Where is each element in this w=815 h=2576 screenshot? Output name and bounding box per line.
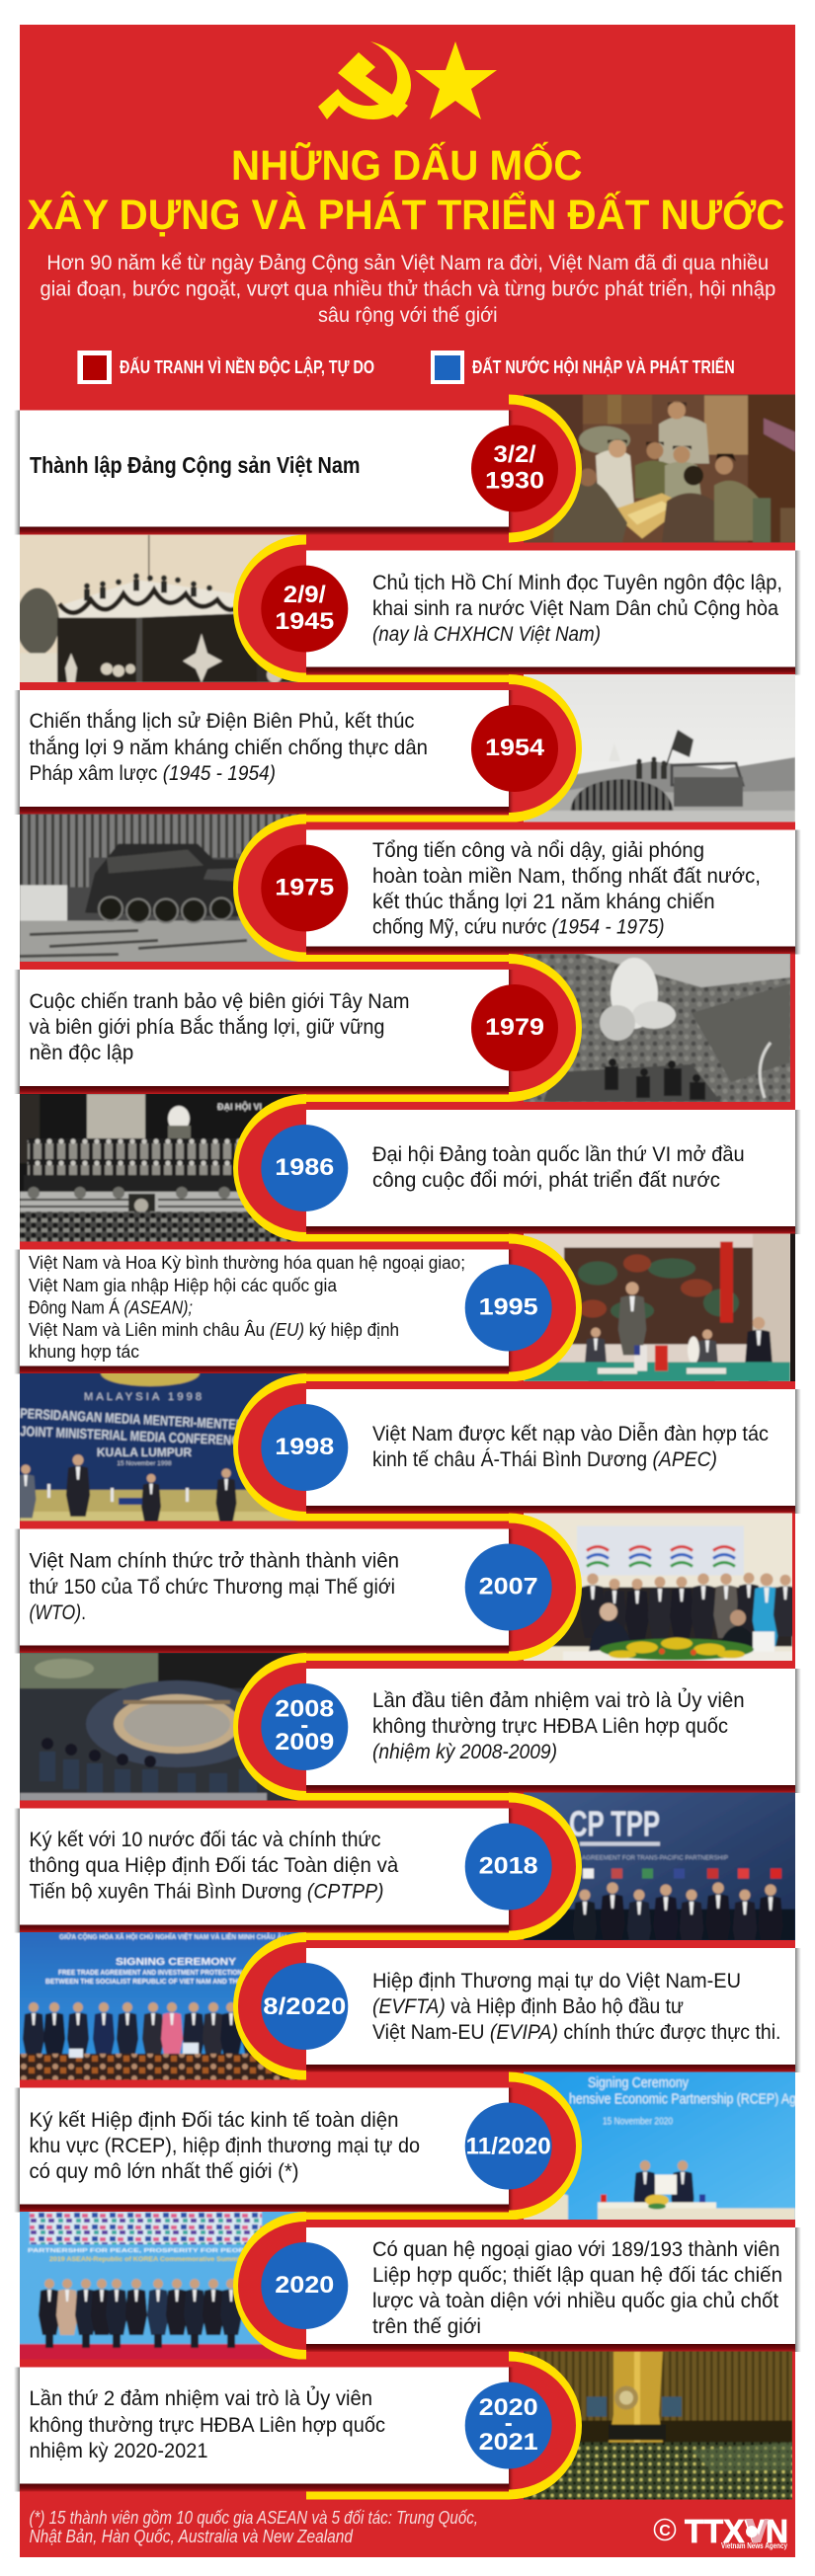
text card: Việt Nam chính thức trở thành thành viên	[30, 1548, 399, 1572]
text card: Tiến bộ xuyên Thái Bình Dương (CPTPP)	[30, 1880, 383, 1904]
date badge	[261, 2242, 348, 2329]
text card	[14, 1528, 515, 1653]
row 2020	[15, 2207, 801, 2365]
text card: nền độc lập	[30, 1041, 133, 1064]
photo: WTO accession signing	[524, 1513, 792, 1661]
text card	[14, 2087, 515, 2212]
photo: APEC ministerial conference: JOINT MINISTERIAL MEDIA CONFERENCE	[20, 1423, 247, 1448]
intro text	[40, 251, 775, 327]
date badge: 2008	[275, 1696, 334, 1722]
text card: Hiệp định Thương mại tự do Việt Nam-EU	[372, 1969, 741, 1992]
text card: (WTO).	[30, 1600, 86, 1624]
date badge: 11/2020	[466, 2133, 551, 2160]
title: XÂY DỰNG VÀ PHÁT TRIỂN ĐẤT NƯỚC	[27, 191, 784, 239]
text card	[14, 411, 515, 535]
row 2018	[14, 1787, 800, 1951]
header	[27, 41, 784, 384]
timeline arc	[20, 2352, 582, 2500]
text card: lược và toàn diện với nhiều quốc gia chủ chốt	[372, 2289, 778, 2312]
date badge	[471, 984, 558, 1071]
photo: EVFTA signing ceremony: GIỮA CỘNG HÒA XÃ HỘI CHỦ NGHĨA VIỆT NAM VÀ LIÊN MINH CHÂU ÂU	[59, 1932, 286, 1941]
photo: APEC ministerial conference	[20, 1373, 306, 1521]
row 1986	[15, 1089, 801, 1247]
photo: UN Security Council chamber	[20, 1653, 306, 1801]
photo: tank at the palace gate	[20, 814, 306, 962]
text card: Tổng tiến công và nổi dậy, giải phóng	[372, 838, 704, 862]
date badge: 2007	[479, 1574, 538, 1600]
text card: Ký kết Hiệp định Đối tác kinh tế toàn diện	[30, 2108, 399, 2132]
row 11/2020	[14, 2068, 800, 2225]
date badge	[261, 845, 348, 932]
timeline arc	[20, 1793, 582, 1941]
photo: EVFTA signing ceremony	[20, 1932, 306, 2079]
yellow closing line under last card	[306, 2492, 509, 2500]
timeline arc	[233, 814, 795, 962]
text card	[306, 551, 801, 675]
date badge	[261, 1125, 348, 1211]
text card: Cuộc chiến tranh bảo vệ biên giới Tây Nam	[30, 989, 409, 1013]
timeline arc	[233, 1932, 795, 2080]
date badge	[465, 1823, 552, 1910]
timeline arc	[20, 674, 582, 822]
date badge: 1954	[485, 735, 545, 761]
row 1954	[14, 669, 800, 827]
photo: APEC ministerial conference: MALAYSIA 1998	[84, 1391, 202, 1403]
timeline arc	[233, 1653, 795, 1801]
photo: CPTPP signing group	[524, 1793, 795, 1940]
text card: (nay là CHXHCN Việt Nam)	[372, 622, 601, 646]
text card: Việt Nam được kết nạp vào Diễn đàn hợp tác	[372, 1421, 769, 1445]
date badge: 1986	[275, 1154, 334, 1181]
row 2008-2009	[15, 1648, 801, 1806]
date badge: 2009	[275, 1729, 334, 1756]
legend: ĐẤU TRANH VÌ NỀN ĐỘC LẬP, TỰ DO	[120, 356, 374, 377]
text card	[14, 1809, 515, 1933]
text card: Việt Nam gia nhập Hiệp hội các quốc gia	[29, 1276, 338, 1295]
date badge	[471, 705, 558, 792]
footnote	[30, 2508, 478, 2546]
text card: Đại hội Đảng toàn quốc lần thứ VI mở đầu	[372, 1142, 745, 1166]
photo: RCEP signing ceremony: 15 November 2020	[603, 2117, 673, 2127]
row 2020-2021	[14, 2346, 800, 2504]
date badge: 3/2/	[494, 441, 536, 468]
date badge: 1975	[275, 875, 334, 900]
text card	[14, 1250, 515, 1374]
footnote: (*) 15 thành viên gồm 10 quốc gia ASEAN và 5 đối tác: Trung Quốc,	[30, 2508, 478, 2528]
row 1930	[14, 389, 800, 547]
timeline arc	[20, 1234, 795, 1382]
photo: ASEAN summit group: PARTNERSHIP FOR PEACE, PROSPERITY FOR PEOPLE	[28, 2248, 256, 2254]
date badge	[471, 425, 558, 511]
title: NHỮNG DẤU MỐC	[231, 141, 583, 190]
text card: kinh tế châu Á-Thái Bình Dương (APEC)	[372, 1446, 717, 1471]
photo: UN General Assembly hall	[524, 2352, 792, 2500]
icon: hammer and sickle with star	[318, 41, 497, 119]
row 1995	[14, 1228, 795, 1387]
text card: nhiệm kỳ 2020-2021	[30, 2439, 207, 2462]
date badge	[261, 1963, 348, 2050]
date badge	[261, 565, 348, 652]
photo: CPTPP signing group: AGREEMENT FOR TRANS-PACIFIC PARTNERSHIP	[582, 1856, 728, 1862]
date badge	[465, 2381, 552, 2468]
text card: khai sinh ra nước Việt Nam Dân chủ Cộng hòa	[372, 596, 778, 620]
footer	[30, 2508, 788, 2550]
row 1945	[15, 529, 801, 687]
photo: independence declaration stage	[20, 535, 306, 682]
text card	[306, 829, 801, 954]
timeline arc	[233, 535, 795, 683]
date badge: 2/9/	[284, 582, 326, 608]
timeline arc	[509, 395, 582, 543]
date badge: 1930	[485, 468, 544, 494]
text card: Liệp hợp quốc; thiết lập quan hệ đối tác chiến	[372, 2263, 782, 2287]
date badge	[261, 1683, 348, 1770]
photo: ASEAN summit group: 2019 ASEAN-Republic of KOREA Commemorative Summit	[49, 2257, 242, 2263]
row 1998	[15, 1361, 801, 1526]
photo: painting of party founding	[524, 395, 795, 543]
text card	[306, 1110, 801, 1234]
date badge: 2020	[275, 2272, 334, 2299]
date badge	[465, 1264, 552, 1351]
photo: APEC ministerial conference: 15 November 1998	[117, 1460, 172, 1467]
intro text: sâu rộng với thế giới	[318, 303, 498, 327]
text card: không thường trực HĐBA Liên hợp quốc	[30, 2413, 385, 2437]
logo: TTXVN: C	[659, 2523, 671, 2539]
date badge: 2018	[479, 1852, 538, 1880]
photo: APEC ministerial conference: PERSIDANGAN MEDIA MENTERI-MENTERI	[20, 1405, 247, 1433]
text card	[14, 970, 515, 1094]
timeline arc	[233, 2212, 795, 2360]
photo: CPTPP signing group: CP TPP	[569, 1803, 660, 1844]
photo: Dien Bien Phu bunker and flag	[524, 674, 795, 821]
row 8/2020	[15, 1927, 801, 2085]
text card: Lần thứ 2 đảm nhiệm vai trò là Ủy viên	[30, 2385, 372, 2410]
text card: khung hợp tác	[29, 1342, 139, 1362]
text card: (nhiệm kỳ 2008-2009)	[372, 1740, 557, 1763]
text card: chống Mỹ, cứu nước (1954 - 1975)	[372, 914, 665, 938]
text card: Việt Nam-EU (EVIPA) chính thức được thực thi.	[372, 2020, 780, 2044]
date badge: -	[300, 1712, 308, 1739]
row 2007	[14, 1509, 800, 1667]
date badge	[465, 1544, 552, 1631]
text card: Việt Nam và Liên minh châu Âu (EU) ký hiệp định	[29, 1320, 399, 1340]
row 1975	[15, 810, 801, 968]
legend	[77, 351, 735, 384]
photo: sixth party congress hall: ĐẠI HỘI VI	[217, 1101, 262, 1112]
date badge: 1995	[479, 1293, 538, 1321]
date badge	[261, 1404, 348, 1491]
text card: Có quan hệ ngoại giao với 189/193 thành viên	[372, 2237, 780, 2261]
text card	[306, 1669, 801, 1793]
photo: APEC ministerial conference: KUALA LUMPUR	[97, 1445, 192, 1459]
date badge: -	[505, 2410, 513, 2437]
text card: có quy mô lớn nhất thế giới (*)	[30, 2159, 298, 2183]
photo: EVFTA signing ceremony: BETWEEN THE SOCIALIST REPUBLIC OF VIET NAM AND THE	[45, 1979, 242, 1986]
text card: thắng lợi 9 năm kháng chiến chống thực dân	[30, 735, 428, 759]
footnote: Nhật Bản, Hàn Quốc, Australia và New Zealand	[30, 2527, 354, 2546]
title	[27, 141, 784, 239]
photo: RCEP signing ceremony: Signing Ceremony	[588, 2074, 689, 2091]
timeline arc	[20, 2071, 582, 2220]
date badge: 2021	[479, 2429, 538, 2456]
text card: thứ 150 của Tổ chức Thương mại Thế giới	[30, 1575, 395, 1599]
text card: không thường trực HĐBA Liên hợp quốc	[372, 1714, 728, 1738]
text card	[14, 690, 515, 815]
date badge: 1998	[275, 1434, 334, 1460]
text card: Chiến thắng lịch sử Điện Biên Phủ, kết thúc	[30, 708, 415, 733]
text card: công cuộc đổi mới, phát triển đất nước	[372, 1168, 720, 1192]
date badge: 2020	[479, 2394, 538, 2421]
text card: Ký kết với 10 nước đối tác và chính thức	[30, 1828, 381, 1851]
text card	[306, 2227, 801, 2352]
photo: sixth party congress hall	[20, 1094, 306, 1242]
text card: trên thế giới	[372, 2314, 481, 2338]
text card: khu vực (RCEP), hiệp định thương mại tự do	[30, 2134, 420, 2157]
photo: normalisation signing ceremony	[524, 1234, 790, 1381]
timeline arc	[20, 1513, 582, 1661]
row 1979	[14, 949, 795, 1107]
date badge: 1979	[485, 1014, 544, 1041]
text card: Lần đầu tiên đảm nhiệm vai trò là Ủy viên	[372, 1687, 745, 1712]
intro text: Hơn 90 năm kể từ ngày Đảng Cộng sản Việt Nam ra đời, Việt Nam đã đi qua nhiều	[46, 251, 769, 274]
text card: Đông Nam Á (ASEAN);	[29, 1297, 193, 1317]
text card: và biên giới phía Bắc thắng lợi, giữ vững	[30, 1014, 385, 1039]
timeline arc	[20, 954, 582, 1102]
text card: Pháp xâm lược (1945 - 1954)	[30, 761, 276, 785]
photo: EVFTA signing ceremony: SIGNING CEREMONY	[116, 1957, 236, 1968]
date badge: 8/2020	[263, 1993, 346, 2020]
date badge	[465, 2103, 552, 2190]
legend: ĐẤT NƯỚC HỘI NHẬP VÀ PHÁT TRIỂN	[472, 356, 735, 377]
text card: (EVFTA) và Hiệp định Bảo hộ đầu tư	[372, 1994, 684, 2018]
timeline arc	[233, 1094, 795, 1242]
photo: ASEAN summit group	[20, 2212, 306, 2360]
timeline arc	[233, 1373, 795, 1522]
photo: RCEP signing ceremony	[524, 2071, 796, 2220]
text card	[306, 1389, 801, 1514]
text card: kết thúc thắng lợi 21 năm kháng chiến	[372, 889, 715, 913]
photo: EVFTA signing ceremony: FREE TRADE AGREEMENT AND INVESTMENT PROTECTION	[58, 1970, 242, 1977]
date badge: 1945	[275, 608, 334, 635]
text card	[306, 1948, 801, 2072]
text card: thông qua Hiệp định Đối tác Toàn diện và	[30, 1853, 398, 1877]
text card: hoàn toàn miền Nam, thống nhất đất nước,	[372, 864, 761, 888]
photo: border war hillside	[524, 954, 790, 1102]
text card: Chủ tịch Hồ Chí Minh đọc Tuyên ngôn độc lập,	[372, 571, 782, 594]
logo: TTXVN: TTXVN	[685, 2513, 788, 2549]
text card: Việt Nam và Hoa Kỳ bình thường hóa quan hệ ngoại giao;	[29, 1253, 465, 1273]
text card: Thành lập Đảng Cộng sản Việt Nam	[30, 452, 360, 478]
intro text: giai đoạn, bước ngoặt, vượt qua nhiều thử thách và từng bước phát triển, hội nhập	[40, 276, 775, 300]
text card	[14, 2368, 515, 2492]
logo: TTXVN: Vietnam News Agency	[721, 2541, 787, 2550]
